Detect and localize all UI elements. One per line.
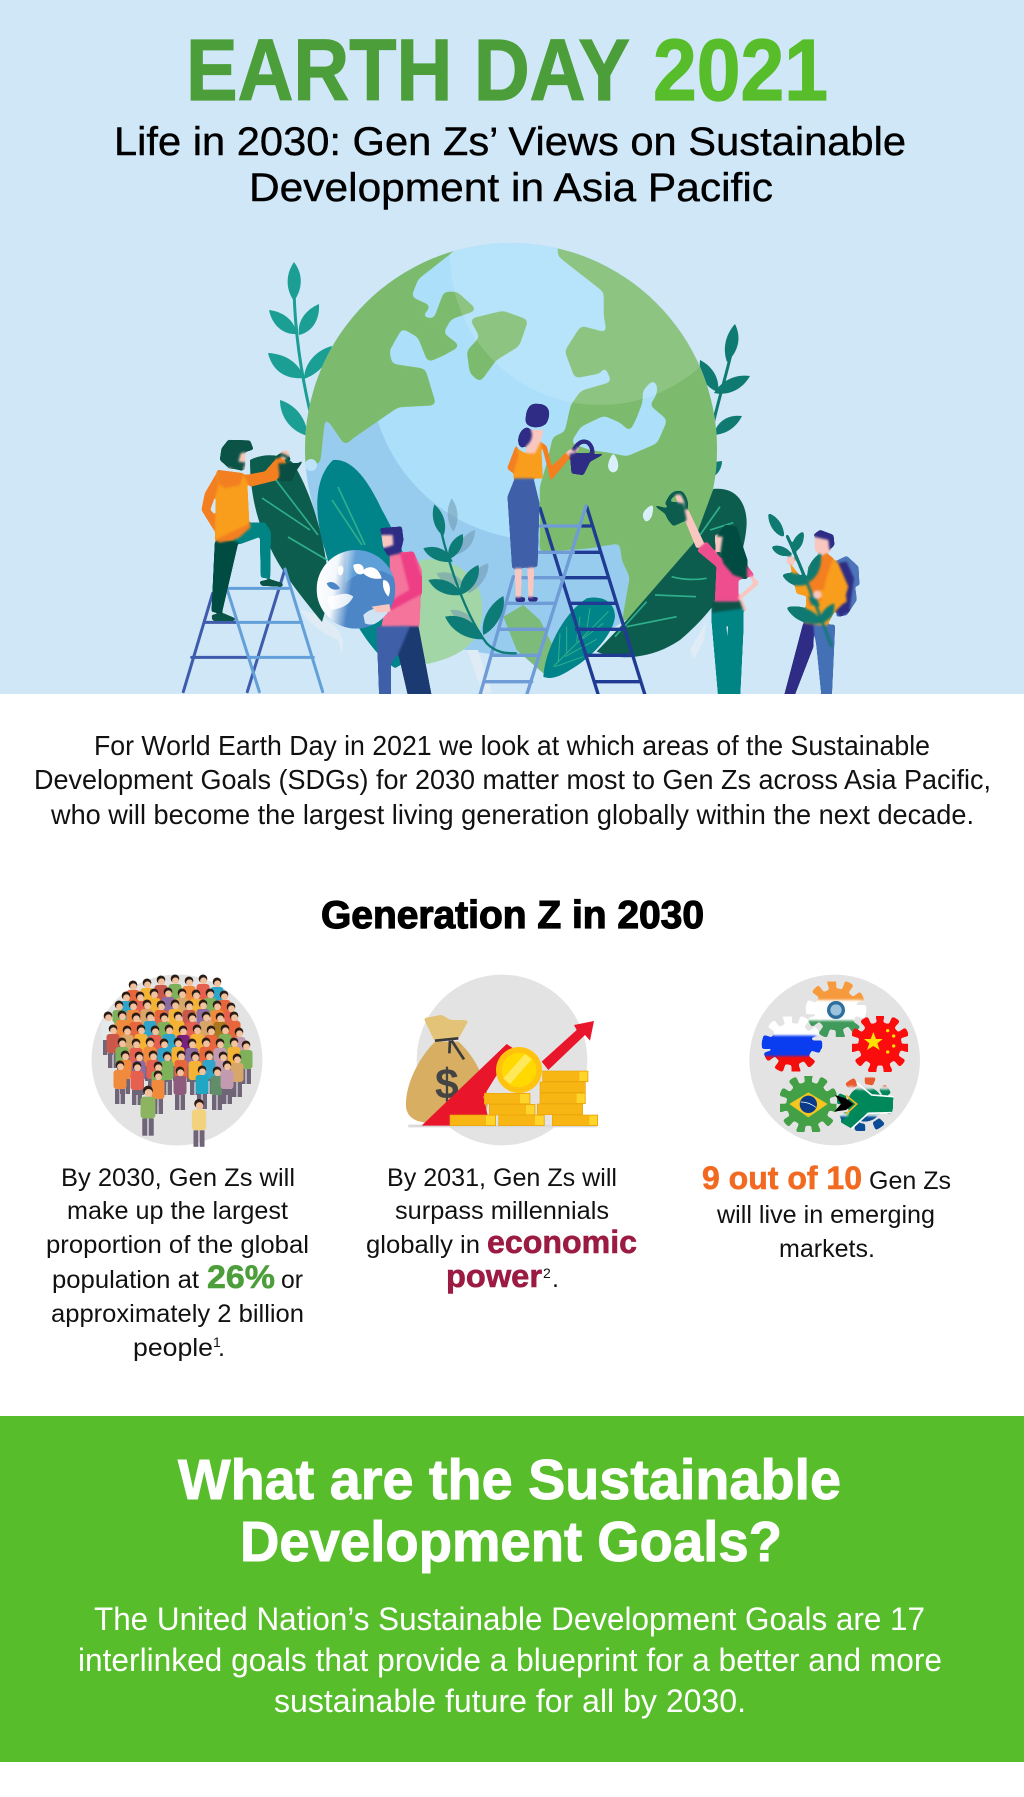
icon: globe land east	[540, 248, 717, 622]
text block: introduction: For World Earth Day in 2021 we look at which areas of the Sustainable	[94, 730, 930, 761]
icon: globe land centre	[467, 311, 528, 382]
icon: back left plant	[268, 262, 332, 436]
subtitle: Development in Asia Pacific	[249, 166, 773, 210]
icon: dark watering can	[278, 459, 304, 481]
icon: small teal leaf	[543, 597, 615, 678]
text block: economic power: power	[446, 1258, 542, 1294]
panel: stat emerging markets	[702, 975, 951, 1263]
title: 2021	[653, 22, 828, 119]
icon: money bag, coins and arrow	[406, 975, 598, 1145]
text block: economic power	[366, 1164, 637, 1294]
heading: what are the Sustainable Development Goals: Development Goals?	[240, 1510, 782, 1574]
icon: left stepladder	[183, 569, 323, 692]
text block: population: .	[218, 1334, 225, 1362]
icon: crowd	[92, 974, 262, 1147]
text block: SDG description: sustainable future for all by 2030.	[274, 1683, 746, 1719]
text block: introduction: Development Goals (SDGs) for 2030 matter most to Gen Zs across Asia Pacific,	[34, 764, 991, 795]
icon: water drop left	[305, 459, 317, 471]
icon: globe	[305, 243, 717, 654]
icon: back right plant	[700, 324, 750, 476]
icon: globe highlight	[450, 243, 700, 405]
icon: Russia gear	[762, 1019, 822, 1069]
icon: centre ladder	[480, 506, 645, 695]
text block: economic power: .	[552, 1265, 559, 1293]
icon: money bag, coins and arrow: $	[435, 1060, 459, 1108]
icon: pale green leaf	[412, 559, 482, 664]
icon: man carrying small globe	[317, 527, 432, 697]
panel: stat economic power	[366, 975, 637, 1294]
icon: Brazil gear	[783, 1079, 834, 1129]
heading: what are the Sustainable Development Goals	[178, 1448, 841, 1574]
icon: dark right leaf	[503, 489, 747, 678]
icon: faint background leaves	[300, 610, 706, 694]
text block: emerging markets: will live in emerging	[716, 1201, 935, 1229]
panel: hero illustration	[0, 0, 1024, 697]
icon: globe inland sea	[571, 380, 667, 456]
icon: man with backpack holding plant	[768, 513, 859, 697]
icon: India gear	[806, 984, 866, 1034]
heading: Generation Z in 2030: Generation Z in 2030	[321, 894, 704, 937]
text block: introduction	[34, 730, 991, 830]
icon: woman in pink watering globe	[643, 493, 759, 697]
icon: dark left leaf	[250, 455, 328, 622]
title: EARTH DAY	[186, 22, 630, 119]
icon: front person left	[141, 1086, 155, 1136]
text block: SDG description	[78, 1601, 942, 1719]
icon: China gear	[855, 1019, 905, 1069]
text block: population: make up the largest	[67, 1197, 288, 1225]
icon: man in orange hoodie on ladder	[202, 440, 304, 621]
text block: population: or	[281, 1266, 303, 1294]
icon: globe land west	[305, 251, 474, 464]
text block: population: people	[133, 1334, 213, 1362]
subtitle: Life in 2030: Gen Zs’ Views on Sustainable	[114, 120, 906, 164]
text block: economic power: By 2031, Gen Zs will	[387, 1164, 617, 1192]
text block: population: 1	[213, 1334, 221, 1350]
panel: stat population	[46, 974, 309, 1362]
text block: emerging markets: markets.	[779, 1235, 875, 1263]
text block: economic power: economic	[487, 1224, 637, 1260]
text block: economic power: 2	[543, 1265, 551, 1281]
text block: introduction: who will become the largest living generation globally within the next decade.	[50, 799, 974, 830]
text block: population: approximately 2 billion	[51, 1300, 304, 1328]
text block: population: By 2030, Gen Zs will	[61, 1164, 295, 1192]
text block: economic power: surpass millennials	[395, 1197, 609, 1225]
text block: population: 26%	[207, 1259, 275, 1295]
panel: what are the SDGs	[0, 1416, 1024, 1762]
heading: what are the Sustainable Development Goals: What are the Sustainable	[178, 1448, 841, 1512]
icon: watering can	[570, 453, 605, 475]
icon: South Africa gear	[834, 1080, 893, 1128]
text block: SDG description: The United Nation’s Sustainable Development Goals are 17	[94, 1601, 925, 1637]
text block: emerging markets: 9 out of 10	[702, 1160, 862, 1196]
icon: woman with watering can on ladder	[507, 404, 618, 602]
text block: emerging markets	[702, 1160, 951, 1263]
text block: population: proportion of the global	[46, 1231, 309, 1259]
icon: small globe	[317, 548, 397, 629]
subtitle	[114, 120, 906, 210]
text block: population	[46, 1164, 309, 1362]
text block: economic power: globally in	[366, 1231, 480, 1259]
icon: BRICS flag gears	[749, 975, 920, 1145]
text block: emerging markets: Gen Zs	[869, 1167, 951, 1195]
icon: pale green leaf under ladder	[503, 605, 553, 673]
text block: population: population at	[52, 1266, 199, 1294]
icon: watering can right	[653, 502, 687, 526]
text block: SDG description: interlinked goals that provide a blueprint for a better and more	[78, 1642, 942, 1678]
icon: front plant and shadow	[423, 498, 517, 653]
icon: teal leaf	[317, 460, 403, 668]
icon: front person right	[192, 1099, 206, 1147]
